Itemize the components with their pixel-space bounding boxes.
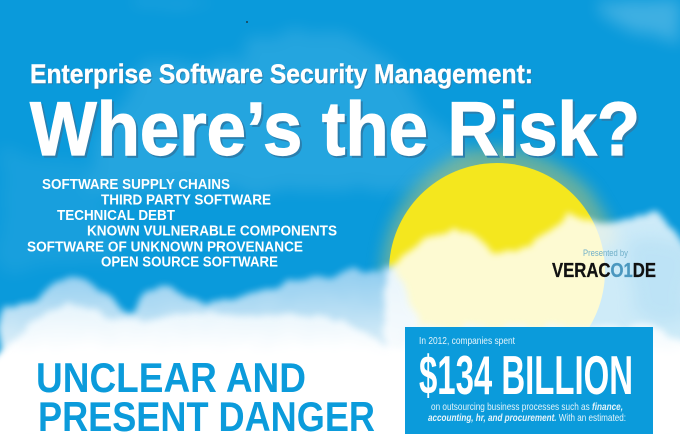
topic list [27,177,337,270]
panel: outsourcing spend [405,327,653,434]
right cloud, translucent over the sun [380,212,680,434]
faint high clouds [0,0,680,270]
main title: Where’s the Risk? [30,87,640,172]
sun [389,163,605,379]
speck [246,21,248,23]
panel body text [428,401,626,424]
back cloud layer [0,268,420,434]
topic: technical debt: TECHNICAL DEBT [57,208,175,224]
topic: open source software: OPEN SOURCE SOFTWARE [101,254,278,270]
presented by credit: Presented by [583,248,628,258]
panel body text: on outsourcing business processes such as finance, [431,401,623,413]
panel body text: accounting, hr, and procurement. With an estimated: [428,412,626,424]
topic: software supply chains: SOFTWARE SUPPLY CHAINS [42,177,230,193]
heading: unclear and present danger: UNCLEAR AND [36,354,306,401]
logo: veracode: VERACO1DE [552,260,656,282]
panel intro text: In 2012, companies spent [419,335,515,347]
right sky cloud body shade [620,240,680,320]
topic: third party software: THIRD PARTY SOFTWARE [101,192,271,208]
sun halo [382,148,620,300]
subtitle: Enterprise Software Security Management: [30,59,533,89]
topic: known vulnerable components: KNOWN VULNERABLE COMPONENTS [87,224,337,240]
topic: software of unknown provenance: SOFTWARE OF UNKNOWN PROVENANCE [27,240,303,256]
front cloud [0,303,680,434]
heading: unclear and present danger [36,354,375,434]
